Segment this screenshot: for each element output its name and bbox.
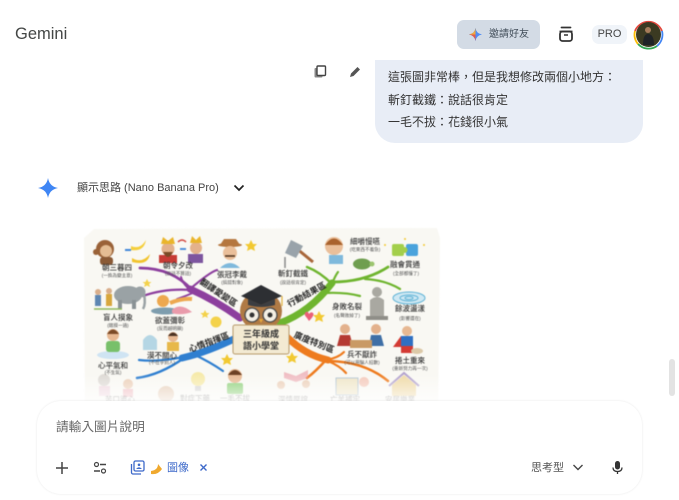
icon: plus [56,462,68,474]
icon: model chevron [573,464,583,470]
idiom labels: 身敗名裂 [332,301,362,311]
idiom labels: (吃東西不着急) [350,246,381,253]
illustration: blind men and elephant [94,286,146,309]
idiom labels: 細嚼慢嚥 [350,236,380,246]
idiom labels: 對症下藥 [180,393,210,403]
idiom labels: (名聲敗掉了) [334,312,360,319]
illustration: superhero [393,326,423,354]
idiom labels: (重新努力再一次) [392,365,428,372]
idiom labels: 張冠李戴 [217,269,247,279]
illustration: smiley and stars [142,240,257,365]
idiom labels: (反而越明顯) [157,325,183,332]
message line 3: 一毛不拔：花錢很小氣 [388,115,508,129]
show thinking label: 顯示思路 (Nano Banana Pro) [77,182,219,194]
model selector label: 思考型 [531,462,564,474]
invite label: 邀請好友 [489,29,529,40]
plaque: three-grade idiom classroom [233,325,289,354]
illustration: boy holding head [227,369,243,394]
illustration: cat and fish [151,295,192,314]
purple branch: vocabulary zone [140,268,240,318]
icon: image stack [130,460,145,475]
idiom labels: 捲土重來 [395,355,425,365]
central owl with graduation cap [233,285,289,354]
idiom labels: (全部都懂了) [393,270,419,277]
illustration: hearts and small stars [286,311,325,363]
message line 2: 斬釘截鐵：說話很肯定 [388,93,508,107]
idiom labels: 兵不厭詐 [347,349,377,359]
idiom labels: 一毛不拔 [220,393,250,403]
illustration: generals at a table [337,324,384,348]
idiom labels: (一換為變主意) [102,272,133,279]
idiom labels: 苦口婆心 [105,394,135,404]
idiom labels: 心平氣和 [98,360,128,370]
icon: microphone [612,461,623,474]
idiom labels: (說話很肯定) [280,279,306,286]
illustration: bottom row left [98,372,205,402]
branch label: purple: 翻譯愛變區 [198,276,239,309]
header title: Gemini: Gemini [15,25,67,43]
invite friends button [457,20,540,49]
icon: tool sliders [94,462,106,474]
PRO badge [592,25,627,44]
branch label: orange: 廣度特別區 [293,330,336,355]
plaque: three-grade idiom classroom: 語小學堂 [243,340,279,351]
illustration: water ripples [393,292,425,304]
idiom labels: (說話不算話) [165,270,191,277]
branch label: green: 行動結果區 [285,280,328,309]
idiom labels: 朝令夕改 [163,260,193,270]
illustration: boy eating and turtle [325,237,374,270]
icon: banana [151,464,162,474]
branch label: blue: 心情指揮區 [187,330,231,354]
blue branch: mood zone [137,337,238,378]
idiom labels: (瞎摸一通) [107,322,129,329]
idiom labels: 漠不關心 [147,350,177,360]
illustration: bottom row right [277,370,419,396]
illustration: puzzle pieces and sparks [384,238,425,256]
icon: copy [314,65,326,78]
orange branch: broad zone [287,337,388,381]
plaque: three-grade idiom classroom: 三年級成 [243,328,279,339]
icon: chevron down [234,184,244,192]
user message bubble [375,60,643,143]
icon: pencil [350,67,360,77]
scrollbar thumb [669,359,675,396]
icon: archive box [559,26,573,42]
idiom labels: 深情厚誼 [278,394,308,404]
icon: close [200,464,207,471]
idiom labels: 餘波盪漾 [395,303,425,313]
icon: colored sparkle [469,28,482,41]
idiom labels: 盲人摸象 [103,312,133,322]
idiom labels: 朝三暮四 [102,262,132,272]
illustration: two kings [159,236,203,263]
idiom labels: (搞錯對象) [221,279,243,286]
PRO badge: PRO [598,28,621,40]
idiom labels: 亡羊補牢 [330,394,360,404]
illustration: axe and nail [285,240,313,268]
input placeholder: 請輸入圖片說明 [56,420,145,434]
green branch: action zone [280,267,400,323]
illustration: monkey and bananas [93,240,150,265]
idiom labels: 欲蓋彌彰 [155,315,185,325]
illustration: man in cowboy hat [218,239,242,268]
illustration: stone statue [366,287,388,320]
icon: Gemini blue star [38,178,58,198]
idiom labels: 融會貫通 [390,259,420,269]
prompt input box [37,401,642,494]
paper background [84,228,440,420]
idiom labels [98,236,428,404]
idiom labels: (不在乎別人) [149,359,175,366]
idiom labels: 安居樂業 [385,394,415,404]
idiom labels: (不生氣) [105,369,122,376]
idiom labels: (影響還在) [399,315,421,322]
illustration: indifferent figures [143,332,179,351]
message line 1: 這張圖非常棒，但是我想修改兩個小地方： [388,70,616,84]
idiom labels: 斬釘截鐵 [278,268,308,278]
image tool label: 圖像 [167,462,189,474]
user avatar with colored ring [634,20,664,50]
image fade to white [80,374,445,404]
illustration: boy meditating [97,329,129,359]
idiom labels: (可以用騙人招數) [344,359,380,366]
